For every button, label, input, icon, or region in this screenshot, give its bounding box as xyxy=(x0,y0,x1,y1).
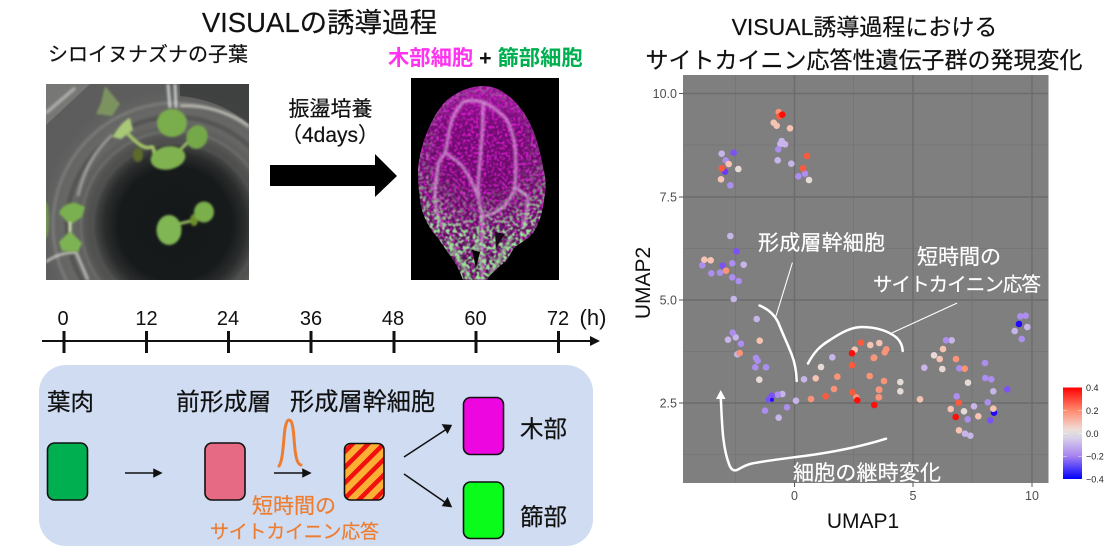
cell: mesophyll: 葉肉 xyxy=(47,389,94,415)
label: cambial stem cells: 形成層幹細胞 xyxy=(758,232,885,255)
cell: xylem xyxy=(464,398,567,454)
legend: colour bar: −0.2 xyxy=(1086,452,1104,462)
arrow: procambium to cambial stem cell xyxy=(274,470,310,476)
axis ticks and labels xyxy=(653,87,1039,503)
axis ticks and labels: 10 xyxy=(1025,489,1039,503)
axis ticks and labels: 5.0 xyxy=(660,294,677,308)
axis ticks and labels: 2.5 xyxy=(660,396,677,410)
arrow: to xylem xyxy=(404,425,451,457)
axis ticks and labels: 0 xyxy=(791,489,798,503)
legend: colour bar: 0.0 xyxy=(1086,429,1099,439)
title: cytokinin response gene expression xyxy=(646,14,1082,73)
photo: cotyledons in culture dish xyxy=(46,84,249,280)
arrow: to phloem xyxy=(404,474,451,506)
cell: procambium xyxy=(176,389,271,500)
cell: phloem: 篩部 xyxy=(520,504,567,530)
timeline axis: 24 xyxy=(217,308,239,330)
title: cytokinin response gene expression: サイトカイニン応答性遺伝子群の発現変化 xyxy=(646,47,1082,73)
timeline axis: 60 xyxy=(464,308,487,330)
annotation: transient cytokinin response trajectory xyxy=(808,303,957,364)
label: xylem cells + phloem cells: 木部細胞 + 篩部細胞 xyxy=(388,46,583,70)
cell: procambium: 前形成層 xyxy=(176,389,271,416)
label: shaking culture 4 days xyxy=(281,98,379,147)
axis title: UMAP2: UMAP2 xyxy=(632,247,655,319)
arrow: black block arrow xyxy=(270,154,397,197)
data points xyxy=(699,109,1031,439)
label: shaking culture 4 days: （4days） xyxy=(281,124,379,147)
timeline axis: 12 xyxy=(135,308,158,330)
panel: differentiation stages xyxy=(39,365,593,546)
label: transient cytokinin response: サイトカイニン応答 xyxy=(210,521,379,543)
label: transient cytokinin response xyxy=(873,246,1041,296)
timeline axis: 48 xyxy=(382,308,404,330)
label: time-course change of cells: 細胞の継時変化 xyxy=(793,462,941,485)
label: shaking culture 4 days: 振盪培養 xyxy=(288,98,372,121)
legend: colour bar: −0.4 xyxy=(1086,474,1104,484)
axis ticks and labels: 10.0 xyxy=(653,87,677,101)
cell: cambial stem cell xyxy=(290,389,435,500)
legend: colour bar xyxy=(1063,383,1104,484)
cell: xylem: 木部 xyxy=(520,416,567,442)
cell: phloem xyxy=(464,482,567,538)
label: transient cytokinin response: サイトカイニン応答 xyxy=(873,274,1041,296)
timeline axis: (h) xyxy=(580,305,606,330)
legend: colour bar: 0.4 xyxy=(1086,383,1099,393)
label: transient cytokinin response: 短時間の xyxy=(917,246,1001,269)
cell: mesophyll xyxy=(47,389,94,500)
timeline axis: 0 xyxy=(57,308,69,330)
title: VISUAL induction process: VISUALの誘導過程 xyxy=(202,7,437,38)
annotation: cambial stem cell trajectory xyxy=(760,263,797,381)
axis ticks and labels: 7.5 xyxy=(660,190,677,204)
timeline axis: 36 xyxy=(300,308,322,330)
label: transient cytokinin response xyxy=(210,495,379,543)
timeline axis xyxy=(42,305,606,353)
title: cytokinin response gene expression: VISUAL誘導過程における xyxy=(732,14,997,40)
cell: cambial stem cell: 形成層幹細胞 xyxy=(290,389,435,416)
label: transient cytokinin response: 短時間の xyxy=(252,495,336,518)
image: cleared leaf with xylem and phloem cells xyxy=(411,78,559,280)
label: Arabidopsis cotyledon: シロイヌナズナの子葉 xyxy=(48,43,248,66)
chart: UMAP scatter plot xyxy=(632,75,1048,533)
legend: colour bar: 0.2 xyxy=(1086,406,1099,416)
arrow: mesophyll to procambium xyxy=(125,470,161,476)
icon: transient cytokinin pulse xyxy=(279,420,301,466)
timeline axis: 72 xyxy=(547,308,569,330)
axis title: UMAP1: UMAP1 xyxy=(827,510,899,533)
annotation: time course arrow xyxy=(716,390,886,470)
axis ticks and labels: 5 xyxy=(910,489,917,503)
